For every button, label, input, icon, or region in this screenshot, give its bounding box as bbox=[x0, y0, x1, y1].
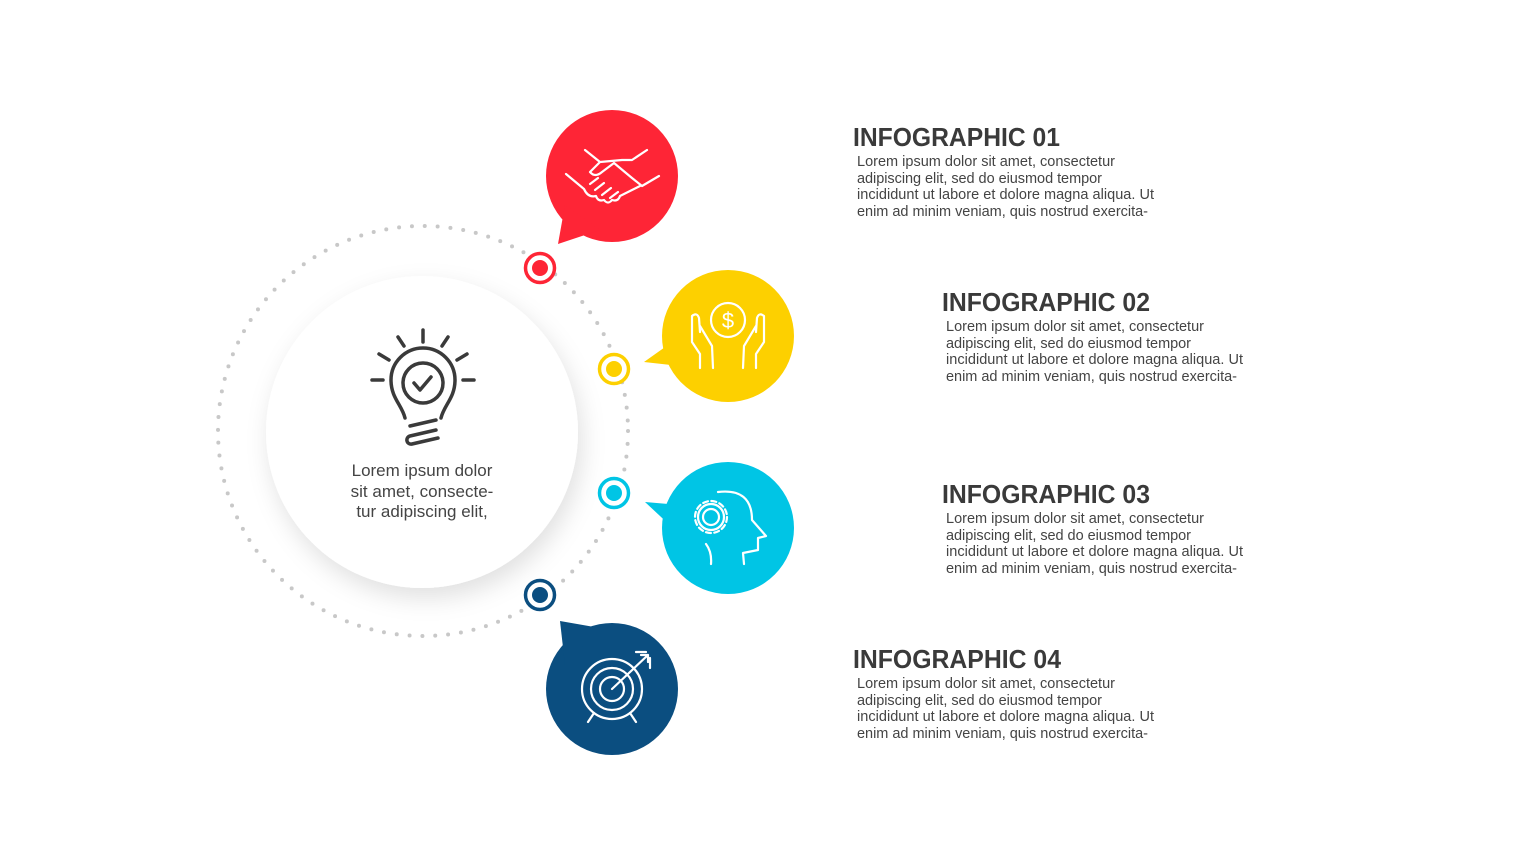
bubble 1 red bbox=[546, 110, 678, 244]
icon: handshake bbox=[566, 150, 659, 202]
icon: lightbulb bbox=[372, 330, 474, 444]
marker 1 bbox=[526, 254, 554, 282]
center text: Lorem ipsum dolor bbox=[352, 461, 493, 480]
text block 1: enim ad minim veniam, quis nostrud exercita- bbox=[857, 204, 1148, 220]
center text: tur adipiscing elit, bbox=[356, 502, 488, 521]
text block 3: incididunt ut labore et dolore magna aliqua. Ut bbox=[946, 544, 1243, 560]
text block 1: adipiscing elit, sed do eiusmod tempor bbox=[857, 171, 1102, 187]
center text: sit amet, consecte- bbox=[351, 482, 493, 501]
text block 1: Lorem ipsum dolor sit amet, consectetur bbox=[857, 154, 1115, 170]
icon: head with gear bbox=[695, 492, 766, 564]
center text bbox=[351, 461, 493, 521]
text block 2: enim ad minim veniam, quis nostrud exercita- bbox=[946, 369, 1237, 385]
text block 4: enim ad minim veniam, quis nostrud exercita- bbox=[857, 726, 1148, 742]
marker 4 bbox=[526, 580, 554, 610]
icon: target bbox=[582, 652, 650, 722]
text block 2: Lorem ipsum dolor sit amet, consectetur bbox=[946, 319, 1204, 335]
text block 3: adipiscing elit, sed do eiusmod tempor bbox=[946, 528, 1191, 544]
text block 1: incididunt ut labore et dolore magna aliqua. Ut bbox=[857, 187, 1154, 203]
center circle bbox=[266, 276, 578, 588]
text block 3 bbox=[942, 479, 1243, 577]
text block 4 bbox=[853, 644, 1154, 742]
text block 4: adipiscing elit, sed do eiusmod tempor bbox=[857, 693, 1102, 709]
text block 1 bbox=[853, 122, 1154, 220]
text block 4: incididunt ut labore et dolore magna aliqua. Ut bbox=[857, 709, 1154, 725]
marker 2 bbox=[600, 354, 628, 384]
text block 4: Lorem ipsum dolor sit amet, consectetur bbox=[857, 676, 1115, 692]
icon: hands with coin: $ bbox=[722, 308, 734, 333]
text block 2: incididunt ut labore et dolore magna aliqua. Ut bbox=[946, 352, 1243, 368]
marker 3 bbox=[600, 478, 628, 508]
dotted ring bbox=[218, 226, 628, 636]
text block 3: enim ad minim veniam, quis nostrud exercita- bbox=[946, 561, 1237, 577]
text block 3: INFOGRAPHIC 03 bbox=[942, 479, 1150, 509]
text block 4: INFOGRAPHIC 04 bbox=[853, 644, 1062, 674]
text block 2: adipiscing elit, sed do eiusmod tempor bbox=[946, 336, 1191, 352]
bubble 3 cyan bbox=[645, 462, 794, 594]
text block 1: INFOGRAPHIC 01 bbox=[853, 122, 1060, 152]
icon: hands with coin bbox=[692, 303, 764, 368]
bubble 2 yellow bbox=[644, 270, 794, 402]
text block 2 bbox=[942, 287, 1243, 385]
text block 2: INFOGRAPHIC 02 bbox=[942, 287, 1150, 317]
text block 3: Lorem ipsum dolor sit amet, consectetur bbox=[946, 511, 1204, 527]
bubble 4 navy bbox=[546, 621, 678, 755]
